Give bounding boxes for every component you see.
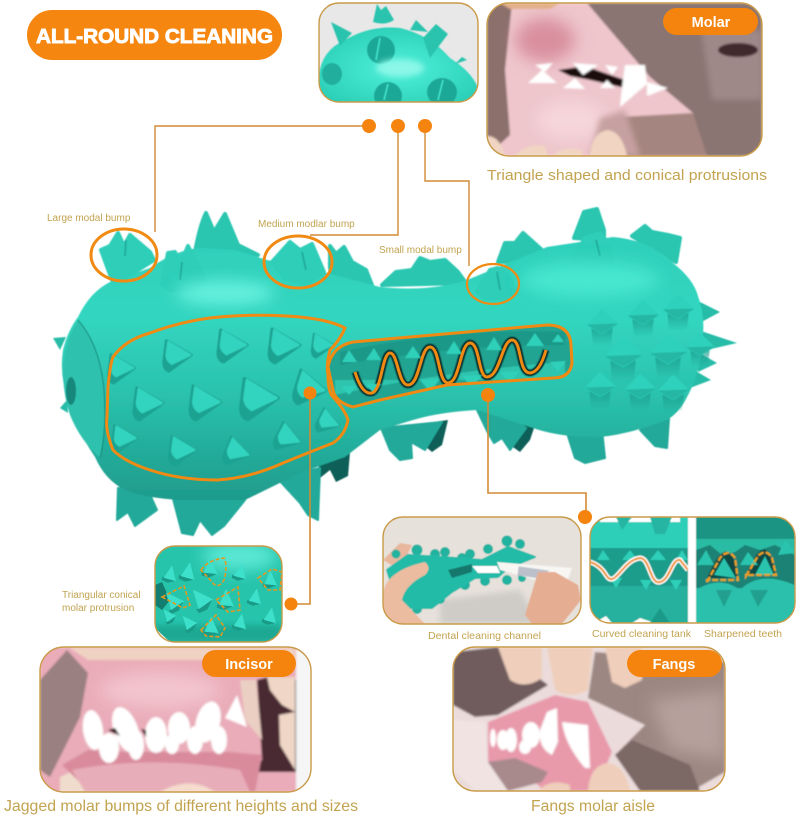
sharpened teeth side xyxy=(696,518,794,608)
panel: triangular protrusion photo xyxy=(155,542,282,642)
main body xyxy=(62,237,703,500)
molar label pill xyxy=(663,8,758,35)
body highlight xyxy=(175,281,275,305)
caption: triangular conical: molar protrusion xyxy=(62,603,134,614)
end spikes xyxy=(53,300,737,413)
panel: incisor photo xyxy=(40,647,311,792)
caption: fangs molar aisle: Fangs molar aisle xyxy=(531,798,655,815)
panel: fangs photo xyxy=(453,647,725,791)
connector: small bump xyxy=(418,119,469,266)
front bumps xyxy=(101,233,611,298)
panel: bump close-up photo xyxy=(319,3,478,110)
molar label pill: Molar xyxy=(692,15,731,31)
title badge: ALL-ROUND CLEANING xyxy=(36,26,273,48)
bottom spikes xyxy=(318,415,535,482)
fangs label pill xyxy=(627,650,722,677)
caption: triangular conical: Triangular conical xyxy=(62,590,141,601)
dental channel xyxy=(330,326,570,406)
curved tank side xyxy=(590,517,688,623)
panel: curved tank and sharpened teeth photos xyxy=(590,517,795,623)
outline: left pyramid zone xyxy=(107,315,348,480)
panel: molar photo xyxy=(487,3,762,156)
back bumps xyxy=(195,209,680,285)
caption: triangle shaped: Triangle shaped and conical protrusions xyxy=(487,167,767,184)
incisor label pill xyxy=(202,650,296,677)
caption: triangular conical xyxy=(62,590,141,614)
caption: dental cleaning channel: Dental cleaning channel xyxy=(428,630,541,642)
connector: triangular protrusion xyxy=(284,386,316,610)
caption: sharpened teeth: Sharpened teeth xyxy=(704,628,782,640)
connector: cleaning channel xyxy=(481,388,592,524)
connector: medium bump xyxy=(310,119,405,235)
label: small bump: Small modal bump xyxy=(379,245,462,256)
fangs label pill: Fangs xyxy=(653,657,695,673)
circle: small bump xyxy=(467,264,519,304)
body highlight right xyxy=(520,262,660,298)
outline: channel zone xyxy=(328,325,572,407)
caption: curved cleaning tank: Curved cleaning tank xyxy=(592,628,692,640)
label: medium bump: Medium modlar bump xyxy=(258,219,355,230)
right pyramids xyxy=(586,295,714,412)
circle: large bump xyxy=(91,229,157,281)
panel: dental cleaning photo xyxy=(383,517,581,624)
caption: jagged molar bumps: Jagged molar bumps of different heights and sizes xyxy=(4,798,358,815)
end cap disc xyxy=(63,320,105,458)
connector: large bump xyxy=(155,119,376,232)
incisor label pill: Incisor xyxy=(225,657,273,673)
left pyramids xyxy=(108,329,343,469)
wavy orange line xyxy=(355,340,546,393)
toy body illustration xyxy=(53,209,737,535)
label: large bump: Large modal bump xyxy=(47,213,131,224)
title badge xyxy=(27,10,282,60)
divider xyxy=(688,517,696,623)
circle: medium bump xyxy=(264,236,332,288)
